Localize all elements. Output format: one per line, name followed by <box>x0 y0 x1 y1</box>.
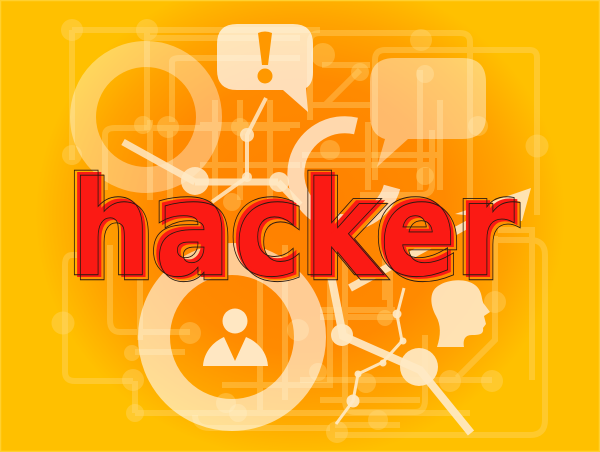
icon: exclamation mark <box>258 32 272 84</box>
speech bubble with exclamation <box>217 24 313 112</box>
title: hacker: hacker <box>72 153 519 309</box>
network connector lower <box>330 270 471 433</box>
network connector left <box>123 98 300 205</box>
title: hacker: hacker <box>69 151 516 307</box>
empty speech bubble <box>370 58 486 167</box>
icon: head silhouette <box>431 280 490 347</box>
top-left ring <box>83 54 209 180</box>
open ring segment <box>296 125 392 223</box>
icon: person <box>203 308 268 366</box>
circuit network <box>52 19 548 443</box>
growth arrow <box>350 188 531 288</box>
lower-left large ring <box>154 259 310 415</box>
